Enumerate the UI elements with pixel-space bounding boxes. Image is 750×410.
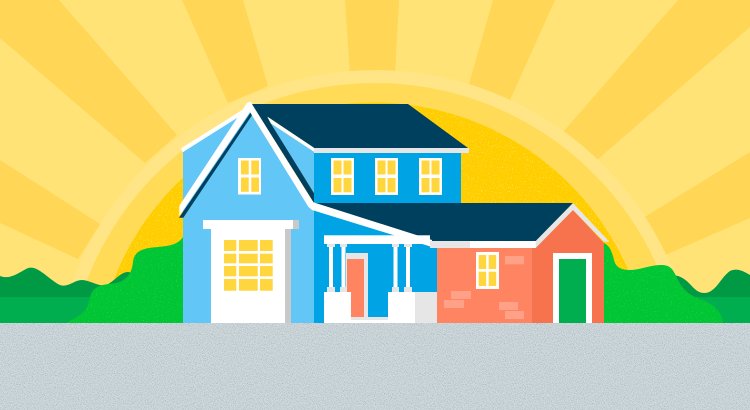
window: upper left <box>331 158 354 195</box>
garage gable wall <box>532 210 604 323</box>
side gable wall <box>271 123 314 193</box>
upper roof <box>252 104 468 203</box>
brick extension wall <box>437 248 532 323</box>
lower floor wall <box>314 205 437 323</box>
sun middle ring <box>74 83 676 323</box>
ground <box>0 323 750 410</box>
side gable white trim <box>267 117 314 152</box>
gable trim <box>179 102 432 247</box>
left bush <box>66 237 183 323</box>
left gable upper wall <box>183 112 252 218</box>
upper roof fascia <box>314 148 469 153</box>
garage gable trim <box>536 203 609 248</box>
meadow band right <box>690 297 750 323</box>
right bush <box>604 243 723 323</box>
eave under lower roof <box>430 241 536 248</box>
sun outer ring <box>60 70 690 323</box>
bay window block <box>203 220 299 323</box>
bricks <box>444 256 524 319</box>
porch beam <box>324 235 430 244</box>
porch door <box>346 253 368 320</box>
porch floor <box>351 317 388 323</box>
sun disk <box>101 102 645 323</box>
sun rays <box>0 0 750 259</box>
second floor wall <box>314 153 461 204</box>
window: brick wall <box>476 252 499 289</box>
meadow band left <box>0 297 110 323</box>
bay window panes <box>224 240 273 291</box>
porch columns <box>327 244 412 292</box>
window: upper right <box>419 158 442 195</box>
gable shadow left <box>179 111 252 218</box>
green door <box>553 253 592 323</box>
porch piers <box>324 292 437 323</box>
window: gable <box>238 158 261 194</box>
lower roof <box>312 203 573 241</box>
house <box>179 102 609 323</box>
front gable wall <box>183 115 314 323</box>
right background hill <box>650 270 750 323</box>
window: upper middle <box>375 158 398 195</box>
background hills <box>0 268 133 323</box>
